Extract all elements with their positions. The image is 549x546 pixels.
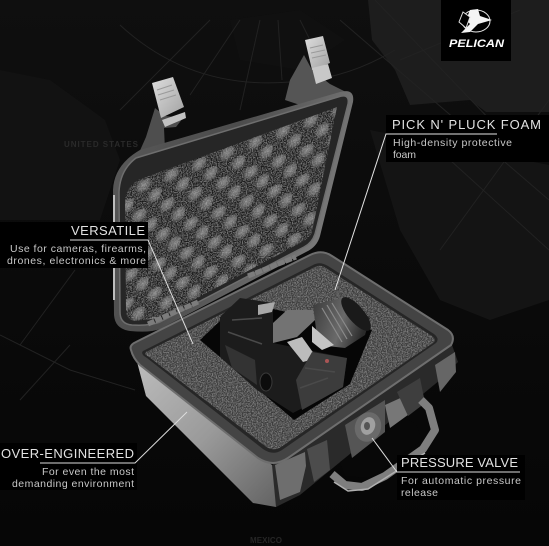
pressure-side recess <box>340 418 422 478</box>
right lid latch <box>285 36 352 105</box>
lid outer shell <box>113 91 353 332</box>
body <box>220 298 347 413</box>
callout: pick n' pluck foam <box>335 115 549 290</box>
icon: pelican bird <box>459 9 492 33</box>
background world map: UNITED STATES <box>64 140 139 149</box>
description <box>12 466 134 490</box>
camera cutout <box>200 302 372 420</box>
heading: PICK N' PLUCK FOAM <box>392 117 541 132</box>
heading: OVER-ENGINEERED <box>1 446 134 461</box>
description: For automatic pressure <box>401 475 521 487</box>
egg-crate foam <box>125 107 337 321</box>
callout: over-engineered <box>0 412 187 490</box>
prism <box>273 310 315 343</box>
Pelican logo <box>441 0 511 61</box>
carry handle <box>332 400 435 487</box>
description: drones, electronics & more <box>7 255 146 267</box>
background world map: MEXICO <box>250 536 282 545</box>
description: foam <box>393 149 416 161</box>
left lid latch <box>138 77 186 165</box>
description: release <box>401 487 438 499</box>
rim <box>131 252 453 463</box>
grip <box>296 352 347 410</box>
description: Use for cameras, firearms, <box>10 243 146 255</box>
front right wall <box>272 345 458 507</box>
icon: pressure valve <box>351 408 385 446</box>
left side wall <box>136 358 298 507</box>
callout: versatile <box>0 222 193 344</box>
callout: pressure valve <box>372 438 525 500</box>
description: demanding environment <box>12 478 134 490</box>
lens <box>312 293 376 350</box>
leader line <box>70 240 193 344</box>
leader line <box>40 412 187 463</box>
latch blocks <box>307 440 330 482</box>
description <box>393 137 512 161</box>
description: High-density protective <box>393 137 512 149</box>
cut foam insert <box>145 266 435 449</box>
camera <box>220 293 376 413</box>
hinges <box>148 257 296 324</box>
description <box>401 475 521 499</box>
base of case <box>131 252 458 507</box>
heading: PRESSURE VALVE <box>401 455 518 470</box>
leader line <box>372 438 520 472</box>
Pelican logo: PELICAN <box>449 38 505 50</box>
leader line <box>335 134 497 290</box>
description: For even the most <box>42 466 134 478</box>
open lid of case <box>113 36 353 332</box>
description <box>7 243 146 267</box>
lcd <box>287 337 317 362</box>
heading: VERSATILE <box>71 223 145 238</box>
